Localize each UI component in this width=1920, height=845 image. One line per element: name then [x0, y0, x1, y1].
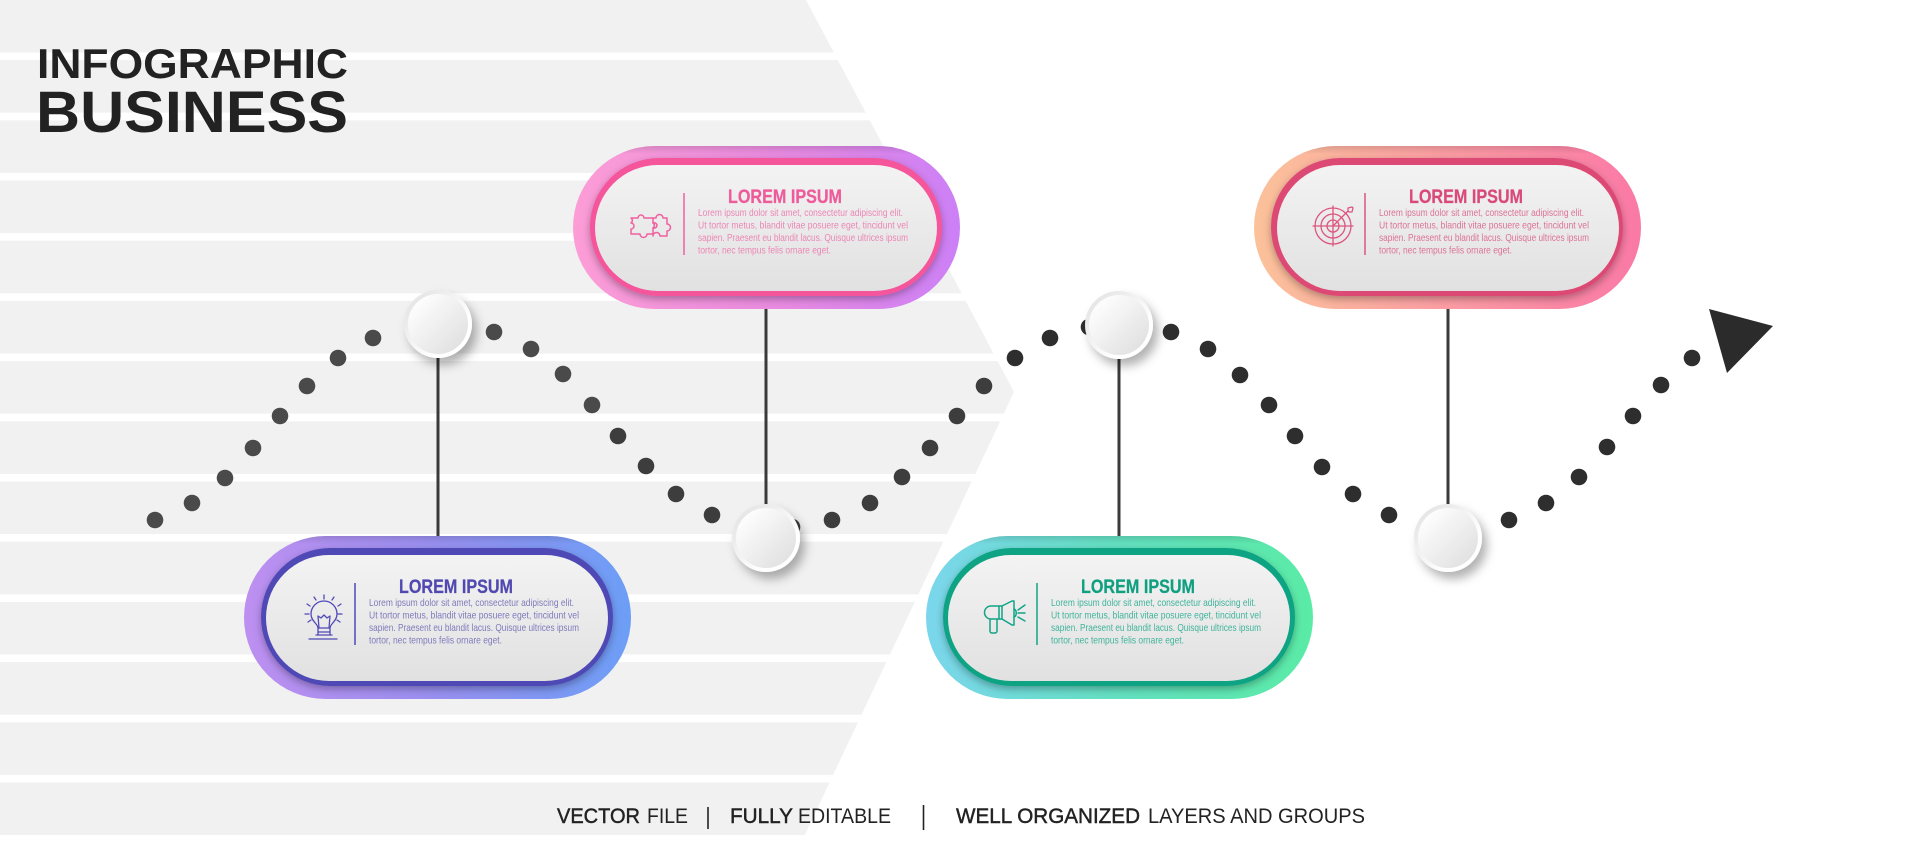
panel: step 2 pink pill: [573, 146, 960, 309]
body text: sapien. Praesent eu blandit lacus. Quisque ultrices ipsum: [1051, 622, 1261, 634]
panel: step 3 green pill: [926, 536, 1313, 699]
heading: Lorem Ipsum: LOREM IPSUM: [1409, 187, 1523, 208]
footer text: FULLY: [730, 805, 793, 828]
body text: Lorem ipsum dolor sit amet, consectetur adipiscing elit.: [698, 207, 903, 219]
footer text: LAYERS AND GROUPS: [1148, 805, 1365, 828]
node circle 3: [1085, 291, 1153, 359]
heading: Lorem Ipsum: LOREM IPSUM: [1081, 577, 1195, 598]
footer text: FILE: [647, 805, 688, 828]
title: BUSINESS: [36, 80, 348, 145]
node circle 1: [404, 290, 472, 358]
body text: tortor, nec tempus felis ornare eget.: [1379, 244, 1512, 256]
arrowhead: [1709, 309, 1773, 373]
connector lines: [438, 307, 1448, 538]
node circle 4: [1414, 504, 1482, 572]
body text: Lorem ipsum dolor sit amet, consectetur adipiscing elit.: [1379, 207, 1584, 219]
body text: [369, 597, 579, 646]
icon: light bulb: [305, 595, 342, 639]
body text: [1051, 597, 1261, 646]
body text: tortor, nec tempus felis ornare eget.: [698, 244, 831, 256]
heading: Lorem Ipsum: LOREM IPSUM: [728, 187, 842, 208]
footer text: EDITABLE: [798, 805, 891, 828]
heading: Lorem Ipsum: LOREM IPSUM: [399, 577, 513, 598]
body text: Ut tortor metus, blandit vitae posuere eget, tincidunt vel: [1051, 610, 1261, 622]
icon: target with arrow: [1313, 206, 1353, 246]
title: INFOGRAPHIC: [37, 40, 348, 87]
body text: tortor, nec tempus felis ornare eget.: [1051, 634, 1184, 646]
icon: megaphone: [985, 601, 1025, 633]
body text: tortor, nec tempus felis ornare eget.: [369, 634, 502, 646]
body text: sapien. Praesent eu blandit lacus. Quisque ultrices ipsum: [369, 622, 579, 634]
background chevron: striped grey arrow shape: [0, 0, 1100, 845]
divider: [354, 583, 356, 645]
node circle 2: [732, 504, 800, 572]
body text: Lorem ipsum dolor sit amet, consectetur adipiscing elit.: [369, 597, 574, 609]
dotted wave path: [147, 319, 1700, 535]
divider: [1364, 193, 1366, 255]
body text: Ut tortor metus, blandit vitae posuere eget, tincidunt vel: [698, 220, 908, 232]
body text: sapien. Praesent eu blandit lacus. Quisque ultrices ipsum: [698, 232, 908, 244]
panel: step 1 purple pill: [244, 536, 631, 699]
icon: puzzle pieces: [631, 215, 671, 238]
footer text: [557, 805, 1365, 830]
body text: Ut tortor metus, blandit vitae posuere eget, tincidunt vel: [369, 610, 579, 622]
divider: [683, 193, 685, 255]
panel: step 4 coral pill: [1254, 146, 1641, 309]
body text: [1379, 207, 1589, 256]
footer text: VECTOR: [557, 805, 640, 828]
body text: Lorem ipsum dolor sit amet, consectetur adipiscing elit.: [1051, 597, 1256, 609]
divider: [1036, 583, 1038, 645]
body text: Ut tortor metus, blandit vitae posuere eget, tincidunt vel: [1379, 220, 1589, 232]
footer text: WELL ORGANIZED: [956, 805, 1140, 828]
body text: sapien. Praesent eu blandit lacus. Quisque ultrices ipsum: [1379, 232, 1589, 244]
title: [36, 40, 348, 145]
body text: [698, 207, 908, 256]
